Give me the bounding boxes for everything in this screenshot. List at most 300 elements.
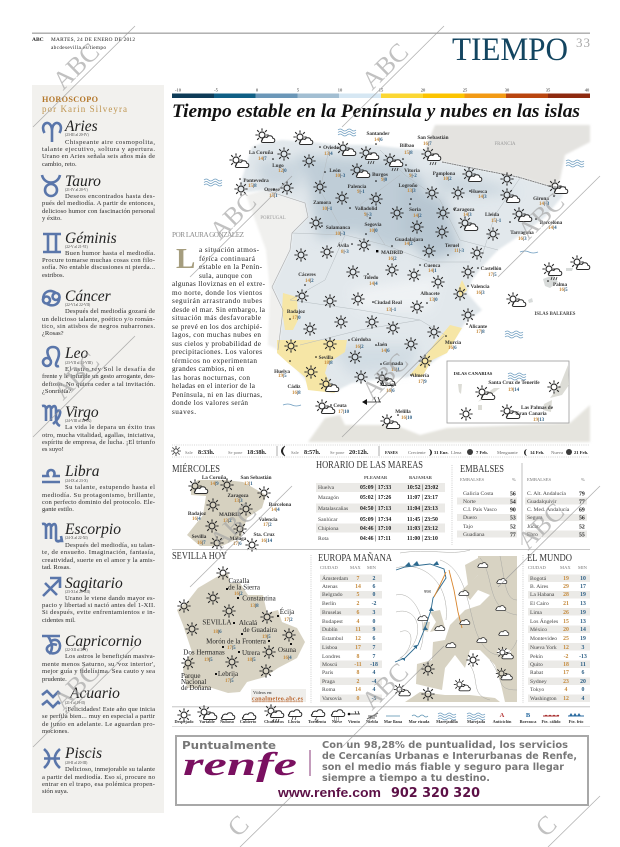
sign: Capricornio: Los astros le benefician masiva-: [65, 653, 155, 660]
sign: Tauro: delicioso humor con fascinación personal: [42, 208, 155, 215]
legend labels: Cubierto: [240, 719, 256, 724]
city: Almería: 17|9: [418, 380, 427, 385]
city: Alicante: 17|8: [476, 330, 485, 335]
pressure label: 998: [424, 589, 432, 594]
temperature colour scale: 40: [585, 88, 590, 92]
table: reservoirs: Duero: [463, 515, 477, 521]
sun times: Se pone: [228, 450, 242, 455]
icon: moon: [281, 446, 285, 456]
city: San Sebastián: 16|7: [423, 142, 432, 147]
city: Toledo: 14|4: [369, 282, 378, 287]
table: Europe tomorrow: 8: [357, 654, 360, 660]
sign: Escorpio: creatividad, suerte en el amor y la amis-: [42, 557, 155, 564]
ABC watermarks: ABC: [512, 497, 570, 555]
province labels: SEVILLA: [202, 618, 232, 626]
city: Huelva: Huelva: [274, 369, 290, 375]
map icons: [188, 478, 271, 552]
ad copy: Con un 98,28% de puntualidad, los servicios: [322, 740, 568, 751]
table: reservoirs: C.I. País Vasco: [463, 507, 497, 513]
table: Europe tomorrow: -2: [372, 601, 377, 607]
table: Europe tomorrow: 9: [373, 627, 376, 633]
table: tides: 05:09 | 17:34: [360, 517, 391, 523]
table: the world: 26: [563, 610, 569, 616]
table: Europe tomorrow: 0: [373, 592, 376, 598]
table: the world: 3: [582, 645, 585, 651]
legend labels: Variable: [199, 719, 215, 724]
table: tides: Sanlúcar: [318, 517, 338, 523]
city: Logroño: 13|3: [407, 189, 416, 194]
ABC watermarks: ABC: [47, 657, 105, 715]
table: Europe tomorrow: Londres: [322, 654, 340, 660]
sign: Tauro: [42, 173, 155, 222]
heading: world: EL MUNDO: [527, 552, 572, 564]
sign: Acuario: [42, 685, 156, 735]
table: the world: Sydney: [530, 679, 547, 685]
sign: Libra: (24-IX al 23-X): [65, 479, 89, 483]
table: Europe tomorrow: MAX: [350, 565, 361, 570]
sign: Tauro: y éxito.: [42, 215, 62, 222]
sign: Aries: Aries: [64, 118, 98, 135]
table: reservoirs: C. Med. Andalucía: [527, 507, 570, 513]
city: Burgos: 9|0: [381, 178, 387, 183]
legend labels: Anticiclón: [493, 719, 512, 724]
table: Europe tomorrow: CIUDAD: [320, 565, 339, 570]
sign: Escorpio: [42, 521, 155, 571]
icon: sun: [171, 446, 181, 456]
moon times: [291, 449, 369, 456]
moon phases: [385, 449, 588, 456]
city: Madrid: 16|2: [388, 257, 397, 262]
table: reservoirs: 69: [579, 508, 585, 514]
article text: a situación atmos-: [199, 246, 260, 254]
map labels: Málaga: [230, 536, 247, 542]
table: reservoirs: 79: [579, 492, 585, 498]
city: Alicante: Alicante: [469, 324, 488, 330]
table: the world: 19: [580, 636, 586, 642]
table: Europe tomorrow: Budapest: [322, 619, 343, 625]
province labels: de Guadaira: [243, 626, 278, 634]
city: Barcelona: Barcelona: [540, 220, 563, 226]
city: Oviedo: Oviedo: [323, 145, 339, 151]
sign: Piscis: [42, 745, 156, 795]
sign: Capricornio: [42, 633, 155, 683]
map labels: San Sebastián: [240, 475, 272, 481]
temperature colour scale: 15: [379, 88, 384, 92]
table: the world: 20: [563, 627, 569, 633]
article text: situación más desfavorable: [172, 314, 261, 322]
legend labels: Mar llana: [384, 719, 403, 724]
table: reservoirs: %: [581, 477, 585, 482]
sign: Cáncer: [42, 288, 155, 337]
legend labels: Borrasca: [520, 719, 537, 724]
province labels: 18|6: [213, 630, 222, 635]
moon times: Se pone: [330, 450, 344, 455]
moon phases: 21 Feb.: [574, 450, 588, 455]
table: Europe tomorrow: 5: [357, 592, 360, 598]
horoscope heading: por Karin Silveyra: [42, 104, 127, 114]
province labels: Écija: [280, 608, 295, 616]
city: Lleida: Lleida: [485, 212, 499, 218]
article text: precipitaciones. Los valores: [172, 348, 262, 356]
map labels: Valencia: [259, 517, 278, 523]
city: Valladolid: 9|-3: [364, 213, 372, 218]
city: Granada: 15|1: [391, 368, 400, 373]
table: the world: Lima: [530, 610, 542, 616]
article text: térmicos no experimentan: [172, 357, 257, 365]
table: reservoirs: Júcar: [527, 524, 539, 530]
article text: Península, ni en las diurnas,: [172, 391, 262, 399]
weather icons: sun with cloud: [229, 128, 590, 428]
sign: Virgo: es suyo!: [42, 446, 64, 453]
table: reservoirs: %: [512, 477, 516, 482]
map labels: 13|2: [223, 519, 232, 524]
moon phases: Llena: [451, 450, 461, 455]
table: Europe tomorrow: 0: [373, 619, 376, 625]
table: the world: 19: [580, 610, 586, 616]
table: the world: 13: [580, 601, 586, 607]
city: Santander: Santander: [366, 131, 390, 137]
sign: Sagitario: Si después, evite enfrentamientos e in-: [42, 609, 155, 616]
city: Soria: Soria: [409, 207, 421, 213]
table: reservoirs: Galicia Costa: [463, 491, 494, 497]
city: León: León: [329, 168, 341, 174]
province labels: Constantina: [242, 594, 277, 602]
table: Europe tomorrow: 4: [373, 670, 376, 676]
province labels: 19|5: [262, 635, 271, 640]
province labels: 16|4: [283, 656, 292, 661]
sign: Escorpio: tad. Rosas.: [42, 564, 71, 571]
canary islands inset: ISLAS CANARIAS: [454, 371, 493, 376]
article text: férica continuará: [199, 255, 256, 263]
sign: Sagitario: Urano le viene dando mayor es-: [65, 595, 155, 602]
ad copy: siempre a tiempo a tu destino.: [322, 773, 490, 784]
city: Málaga: 16|6: [386, 389, 395, 394]
province labels: Parque: [181, 672, 200, 680]
table: Europe tomorrow: 6: [373, 636, 376, 642]
table: Europe tomorrow: 4: [357, 619, 360, 625]
table: Europe tomorrow: Lisboa: [322, 645, 338, 651]
city: Orense: 15|1: [269, 194, 278, 199]
ad tagline: Puntualmente: [182, 739, 276, 752]
table: the world: 28: [563, 592, 569, 598]
sign: Acuario: de junio en adelante. Le aguardan pro-: [42, 721, 155, 728]
table: Europe tomorrow: París: [322, 670, 333, 676]
warm areas (yellow): [277, 280, 467, 393]
table: tides: 04:46 | 17:10: [360, 526, 391, 532]
temperature colour scale: 20: [421, 88, 426, 92]
sign: Géminis: [42, 230, 155, 279]
city: Zamora: Zamora: [313, 200, 331, 206]
table: Europe tomorrow: 12: [355, 636, 361, 642]
land: Balearic islands: [528, 268, 573, 303]
map labels: 16|14: [261, 539, 273, 544]
sun times: Sale: [185, 450, 193, 455]
temperature colour scale: 0: [256, 88, 259, 92]
header: date and url: ABC: [32, 37, 44, 43]
ad divider: [310, 750, 311, 776]
city: Badajoz: Badajoz: [287, 309, 306, 315]
table: the world: 17: [563, 670, 569, 676]
sign: Capricornio: mejor guía y fidelísima. Sea cauto y sea: [42, 668, 155, 675]
city: Logroño: Logroño: [399, 183, 418, 189]
panel: Renfe advertisement: [176, 736, 588, 805]
province labels: Morón de la Frontera: [206, 638, 267, 646]
city: Palma: 16|5: [559, 288, 568, 293]
city: Ávila: 8|-3: [341, 250, 349, 255]
legend labels: Fte. cálido: [541, 719, 561, 724]
table: Europe tomorrow: Praga: [322, 679, 335, 685]
map labels: 13|1: [244, 482, 253, 487]
table: the world: CIUDAD: [528, 565, 547, 570]
sign: Acuario: mociones.: [42, 728, 69, 735]
table: tides: Mazagón: [318, 495, 339, 501]
table: the world: Pekín: [530, 654, 543, 660]
warm front: [434, 570, 462, 628]
main headline: Tiempo estable en la Península y nubes en las islas: [172, 102, 580, 122]
legend labels: Viento: [348, 719, 360, 724]
city: Girona: 14|-3: [539, 202, 549, 207]
table: reservoirs: 56: [510, 492, 516, 498]
article text: sus cielos y probabilidad de: [172, 340, 261, 348]
land: France: [425, 125, 590, 187]
article text: seguirán arrastrando nubes: [172, 297, 262, 305]
ABC watermarks: C: [222, 809, 255, 842]
temperature colour scale: 30: [505, 88, 510, 92]
table: tides: 05:02 | 17:26: [360, 495, 391, 501]
sun times: 8:33h.: [198, 449, 215, 456]
city: Madrid: MADRID: [381, 250, 403, 256]
sign: Cáncer: (22-VI al 22-VII): [65, 303, 91, 307]
moon phases: Menguante: [497, 450, 518, 455]
sign: Aries: cambio, reto.: [42, 161, 77, 168]
dotted column separators: [311, 555, 523, 703]
city: Huesca: 14|3: [478, 195, 487, 200]
sign: Cáncer: un delicioso talante, poético y/o román-: [42, 316, 155, 323]
table: the world: 23: [563, 679, 569, 685]
table: Europe tomorrow: 0: [357, 696, 360, 702]
sign: Leo: (23-VII al 23-VIII): [65, 361, 93, 365]
article text: grandes cambios, ni en: [172, 365, 244, 373]
sign: Piscis: a partir del mediodía. Eso sí, procure no: [42, 774, 156, 781]
table: the world: MAX: [560, 565, 571, 570]
sign: Sagitario: Sagitario: [65, 575, 123, 592]
city: Cuenca: Cuenca: [424, 263, 441, 269]
legend icons: [177, 704, 584, 722]
table: the world: -13: [579, 654, 587, 660]
sign: Virgo: Virgo: [65, 404, 99, 421]
table: the world: Washington: [530, 696, 557, 702]
table: the world: 10: [580, 576, 586, 582]
province labels: 17|5: [227, 646, 236, 651]
panel: Wednesday map: [172, 463, 292, 552]
heading: tides: HORARIO DE LAS MAREAS: [316, 459, 423, 471]
sign: Sagitario: (23-XI al 21-XII): [65, 590, 91, 594]
isobars: [396, 550, 517, 700]
table: tides: Chipiona: [318, 526, 339, 532]
sign: Libra: gante estilo.: [42, 506, 74, 513]
table: Europe tomorrow: 2: [357, 679, 360, 685]
table: reservoirs: Segura: [527, 515, 543, 521]
table: Europe tomorrow: 2: [357, 601, 360, 607]
table: Europe tomorrow: 11: [355, 627, 361, 633]
map labels: Sta. Cruz: [253, 532, 275, 538]
city: Santander: 14|6: [374, 138, 383, 143]
province labels: de la Sierra: [228, 584, 261, 592]
sign: Piscis: entrar en el trapo, esa polémica propen-: [42, 781, 155, 788]
city: Orense: Orense: [264, 187, 281, 193]
city: Palma: Palma: [553, 282, 567, 288]
sign: Virgo: La vida le depara un éxito tras: [65, 424, 155, 431]
ad contact: [277, 785, 480, 801]
sign: Leo: ¿Sonrisita?: [42, 388, 71, 395]
panel: Sevilla today: [172, 550, 306, 702]
temperature colour scale: -5: [214, 88, 219, 92]
legend icons: B: [526, 712, 531, 719]
map labels: Badajoz: [188, 511, 207, 517]
city: Granada: Granada: [383, 361, 403, 367]
table: the world: 29: [563, 584, 569, 590]
sign: Cáncer: Después del mediodía gozará de: [65, 308, 155, 315]
city: Málaga: Málaga: [380, 382, 397, 388]
article text: suaves.: [172, 408, 196, 416]
moon phases: 14 Feb.: [530, 450, 544, 455]
table: the world: Los Ángeles: [530, 617, 558, 625]
terrain shading: [256, 155, 520, 375]
sign: Aries: talante ejecutivo, soltura y apertura.: [42, 146, 155, 153]
ABC watermarks: ABC: [204, 187, 262, 245]
table: the world: La Habana: [530, 592, 555, 598]
map labels: 16|4: [192, 517, 201, 522]
city: Sevilla: Sevilla: [319, 355, 334, 361]
city: Jaén: Jaén: [377, 342, 387, 348]
map labels: 13|3: [234, 499, 243, 504]
province labels: 13|8: [250, 604, 259, 609]
table: the world: 19: [563, 576, 569, 582]
city: Girona: Girona: [533, 196, 549, 202]
article text: algunas lloviznas en el extre-: [172, 280, 266, 288]
map labels: 17|2: [263, 523, 272, 528]
legend icons: A: [500, 712, 505, 719]
ABC watermarks: C: [530, 809, 563, 842]
city: Barcelona: 14|4: [548, 226, 557, 231]
city: Cáceres: 14|2: [305, 279, 314, 284]
city: Valencia: 16|3: [476, 291, 485, 296]
table: Europe tomorrow: 6: [357, 610, 360, 616]
chart: Europe weather map: [394, 550, 517, 702]
sign: Acuario: (21-I al 19-II): [65, 701, 86, 705]
sign: Capricornio: (22-XII al 20-I): [65, 648, 88, 652]
table: reservoirs: Tajo: [463, 524, 473, 530]
ABC watermarks: ABC: [47, 347, 105, 405]
table: tides: 11:04 | 23:13: [407, 506, 438, 512]
sign: Cáncer: ¿Rosas?: [42, 330, 64, 337]
table: the world: 11: [580, 662, 586, 668]
city: Castellón: Castellón: [481, 266, 501, 272]
country labels: FRANCIA: [494, 142, 516, 147]
ABC watermarks: ABC: [356, 37, 414, 95]
table: the world: Bogotá: [530, 576, 547, 582]
table: Europe tomorrow: Ámsterdam: [322, 574, 349, 582]
table: the world: 4: [565, 687, 568, 693]
city: Burgos: Burgos: [372, 172, 388, 178]
table: reservoirs: EMBALSES: [527, 477, 551, 482]
map labels: Zaragoza: [227, 493, 249, 499]
sign: Aries: Chispeante aire cosmopolita,: [65, 139, 155, 146]
city: Huesca: Huesca: [471, 189, 487, 195]
table: the world: Tokyo: [530, 687, 544, 693]
sign: Capricornio: mente menos Saturno, su 'voz interior',: [42, 661, 155, 668]
table: Europe tomorrow: Moscú: [322, 662, 337, 668]
table: tides: BAJAMAR: [409, 475, 433, 480]
city: Pamplona: Pamplona: [433, 171, 456, 177]
city: La Coruña: La Coruña: [249, 150, 274, 156]
country labels: PORTUGAL: [260, 216, 286, 221]
table: reservoirs: [452, 463, 587, 545]
table: Europe tomorrow: 2: [373, 576, 376, 582]
sun times: 18:38h.: [247, 449, 267, 456]
province labels: 19|5: [204, 658, 213, 663]
moon times: 8:57h.: [304, 449, 321, 456]
province labels: 17|2: [284, 618, 293, 623]
legend: [172, 704, 590, 727]
article text: desde el mar. Sin embargo, la: [172, 306, 266, 314]
table: tides: 11:03 | 23:12: [407, 526, 438, 532]
city: Santa Cruz de Tenerife: Santa Cruz de Tenerife: [488, 380, 540, 386]
ad contact: www.renfe.com: [277, 785, 381, 800]
table: Europe tomorrow: Berlín: [322, 601, 336, 607]
sign: Tauro: pués del mediodía. A partir de entonces,: [42, 200, 155, 207]
province labels: de Doñana: [181, 684, 212, 692]
table: Europe tomorrow: Estambul: [322, 636, 344, 642]
legend labels: Nieve: [332, 719, 342, 724]
city: Badajoz: 17|0: [292, 316, 301, 321]
table: the world: -2: [564, 654, 569, 660]
moon phases: 7 Feb.: [476, 450, 488, 455]
city: Lugo: Lugo: [272, 163, 284, 169]
sign: Acuario: Acuario: [69, 685, 120, 702]
table: tides: 04:50 | 17:13: [360, 506, 391, 512]
province labels: [181, 577, 297, 692]
city: Pamplona: 10|2: [443, 177, 452, 182]
city: Castellón: 17|5: [488, 273, 497, 278]
sign: Libra: Libra: [64, 463, 100, 480]
table: Europe tomorrow: MIN: [367, 565, 377, 570]
table: tides: Huelva: [318, 485, 335, 491]
table: Europe tomorrow: -5: [372, 696, 377, 702]
table: the world: 25: [563, 636, 569, 642]
table: Europe tomorrow: Dublín: [322, 627, 338, 633]
table: reservoirs: 77: [510, 532, 516, 538]
sign: Géminis: (22-V al 21-VI): [65, 245, 88, 249]
city: Ávila: Ávila: [337, 241, 349, 249]
table: Europe tomorrow: Bruselas: [322, 610, 341, 616]
sign: Escorpio: te, de ensueño. Imaginación, fantasía,: [42, 549, 155, 556]
sign: Leo: frente y le infunde un gesto arrogante, des-: [42, 373, 155, 380]
table: the world: México: [530, 627, 547, 633]
legend labels: Marejadilla: [436, 719, 459, 724]
table: the world: Montevideo: [530, 636, 557, 642]
city: Huelva: 19|5: [278, 374, 287, 379]
city: Tarragona: 16|3: [518, 237, 527, 242]
sign: Aries: (23-III al 20-IV): [65, 133, 90, 137]
table: the world: 19: [580, 592, 586, 598]
city: Palencia: Palencia: [348, 184, 367, 190]
table: tides: 04:46 | 17:11: [360, 536, 391, 542]
country labels: [260, 142, 576, 317]
ad copy: [322, 740, 577, 784]
panel: horoscope: [32, 85, 164, 813]
table: reservoirs: Guadiana: [463, 532, 485, 538]
